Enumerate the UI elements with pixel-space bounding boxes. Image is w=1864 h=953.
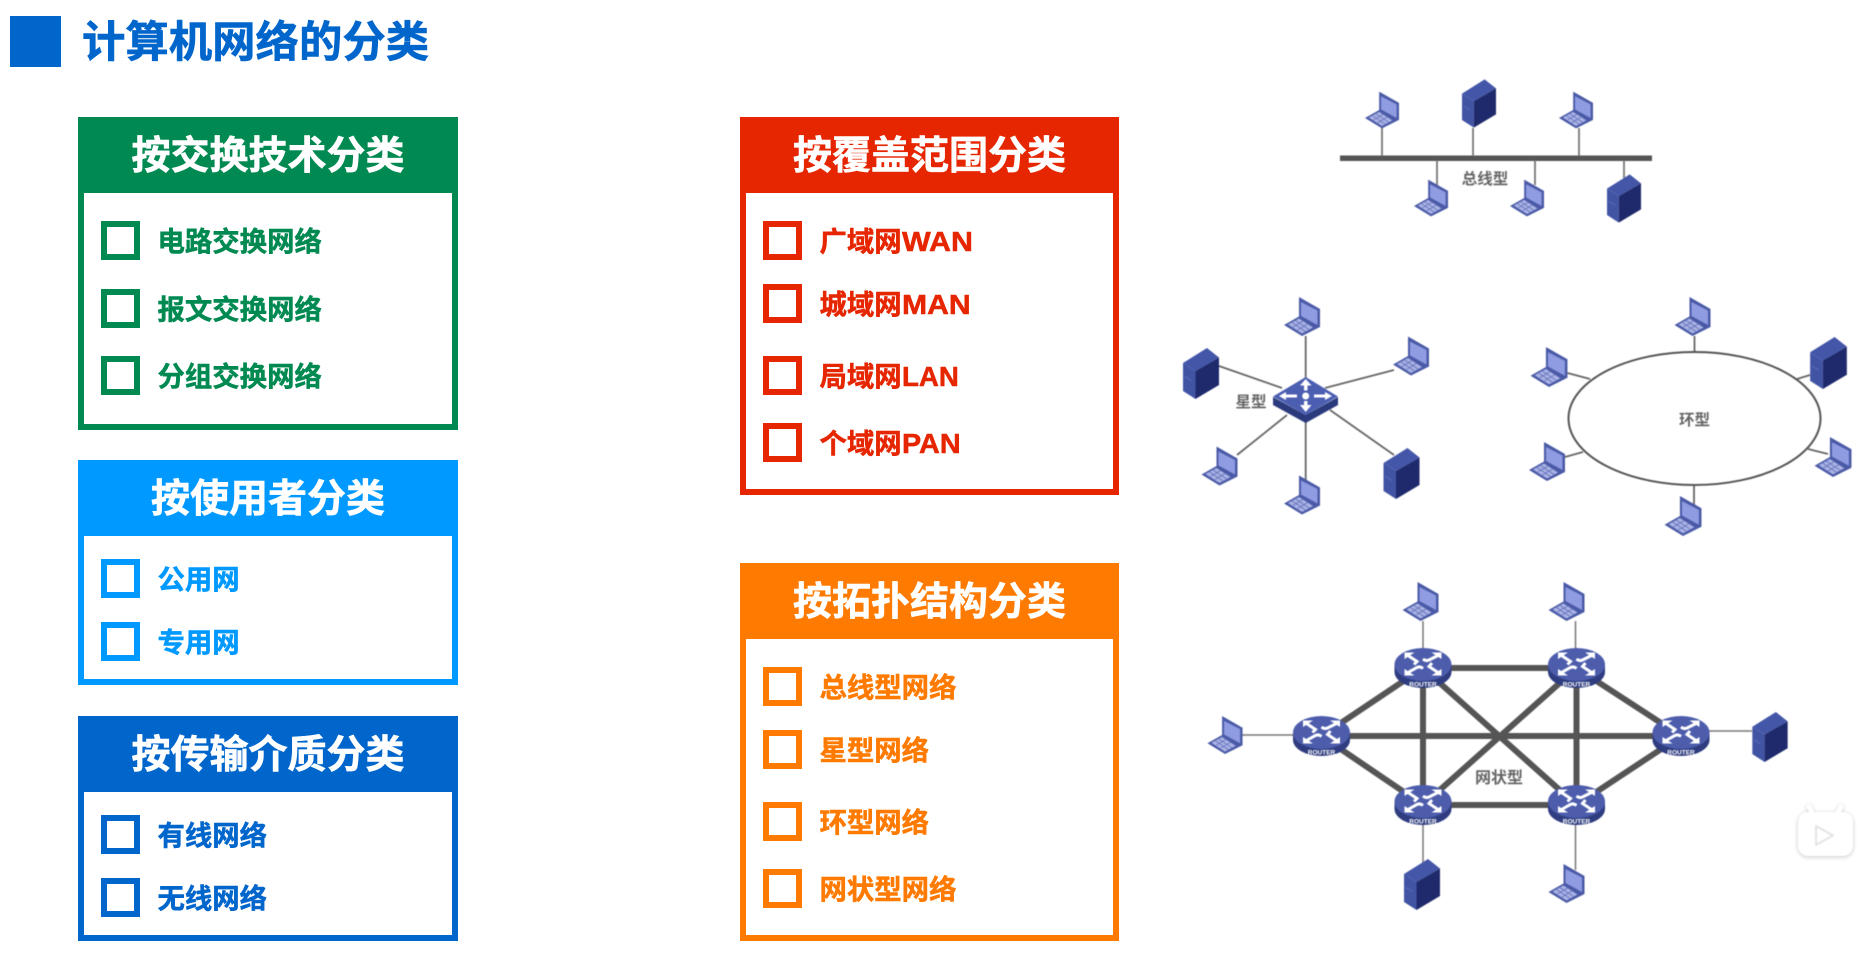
item: circuit switching [101,221,322,260]
icon: router left [1293,716,1350,756]
icon: laptop [1284,297,1320,336]
ring [1568,352,1820,485]
item: packet switching [101,356,322,395]
heading: transmission medium: 按传输介质分类 [131,734,404,777]
icon: laptop [1402,582,1438,621]
heading: topology [740,563,1119,639]
title: 计算机网络的分类 [82,19,429,67]
icon: video site watermark [1798,807,1853,856]
icon: router top-right [1548,648,1605,688]
diagram: bus topology [1340,79,1652,223]
item: wired network: 有线网络 [158,820,267,850]
bus backbone [1340,156,1652,161]
heading: switching technology [78,117,458,193]
icon: server [1384,448,1420,499]
label: mesh: 网状型 [1475,769,1523,787]
item: mesh network [763,869,956,908]
icon: router right [1652,716,1710,756]
icon: laptop [1414,180,1448,216]
item: star network [763,730,929,769]
item: packet switching: 分组交换网络 [158,361,322,392]
panel: by transmission medium [78,716,458,941]
label: star: 星型 [1235,393,1267,411]
icon: server [1810,337,1847,389]
icon: laptop [1207,716,1243,754]
item: bus network: 总线型网络 [820,672,956,703]
icon: laptop [1510,180,1544,216]
icon: central switch [1273,377,1338,423]
icon: laptop [1559,92,1593,128]
icon: laptop [1202,446,1238,486]
icon: router right: ROUTER [1667,750,1695,756]
item: LAN: LAN [902,361,959,392]
mesh thick links [1322,668,1681,805]
diagram: star topology [1183,297,1429,514]
icon: laptop [1665,496,1701,536]
star links [1219,336,1394,480]
panel: by switching technology [78,117,458,430]
item: WAN: 广域网 [820,226,902,257]
icon: router left: ROUTER [1308,750,1336,756]
icon: router bottom-left: ROUTER [1409,818,1437,826]
item: MAN [763,284,970,323]
ring links [1565,336,1828,510]
icon: laptop [1531,347,1567,387]
heading: switching technology: 按交换技术分类 [131,135,404,178]
icon: router top-left [1394,648,1452,688]
item: MAN: 城域网 [820,289,902,320]
item: public network [101,559,240,598]
diagram: mesh topology [1207,582,1788,910]
item: message switching [101,289,322,328]
item: MAN: MAN [902,289,970,320]
item: WAN [763,221,973,260]
item: mesh network: 网状型网络 [820,874,956,904]
heading: user [78,460,458,536]
item: wireless network [101,878,267,917]
mesh thin links [1242,621,1752,870]
diagram: ring topology [1529,297,1851,536]
item: WAN: WAN [902,226,973,257]
icon: laptop [1529,442,1565,481]
item: star network: 星型网络 [820,735,929,766]
icon: router top-right: ROUTER [1563,682,1591,688]
icon: router bottom-left [1394,785,1452,826]
icon: laptop [1674,297,1710,336]
bus drop lines [1382,128,1624,185]
item: PAN: PAN [902,428,960,459]
title icon: blue square [10,16,61,67]
item: wireless network: 无线网络 [158,882,267,914]
icon: router top-left: ROUTER [1409,682,1437,688]
heading: topology: 按拓扑结构分类 [793,581,1066,624]
item: ring network [763,802,929,841]
heading: coverage [740,117,1119,193]
panel: by coverage [740,117,1119,495]
heading: transmission medium [78,716,458,792]
icon: server [1752,712,1788,762]
icon: server [1404,859,1440,910]
icon: server [1607,174,1641,223]
icon: laptop [1284,476,1320,514]
item: message switching: 报文交换网络 [158,294,322,325]
item: public network: 公用网 [158,564,240,595]
icon: router bottom-right: ROUTER [1563,818,1591,826]
label: bus: 总线型 [1462,169,1508,188]
item: wired network [101,815,267,854]
heading: coverage: 按覆盖范围分类 [793,135,1066,178]
panel: by user [78,460,458,685]
item: PAN [763,423,960,462]
icon: laptop [1393,336,1429,376]
item: ring network: 环型网络 [820,807,929,838]
icon: server [1183,348,1219,399]
item: LAN [763,356,959,395]
icon: laptop [1548,582,1584,621]
item: LAN: 局域网 [820,361,902,392]
item: circuit switching: 电路交换网络 [158,226,322,257]
icon: router bottom-right [1548,785,1605,826]
icon: laptop [1548,864,1584,903]
icon: server [1462,79,1496,128]
item: bus network [763,667,956,706]
item: private network: 专用网 [158,627,240,658]
item: PAN: 个域网 [820,428,902,459]
icon: laptop [1365,92,1399,128]
label: ring: 环型 [1679,411,1710,429]
panel: by topology [740,563,1119,941]
icon: laptop [1815,437,1851,477]
item: private network [101,622,240,661]
heading: user: 按使用者分类 [151,478,385,521]
